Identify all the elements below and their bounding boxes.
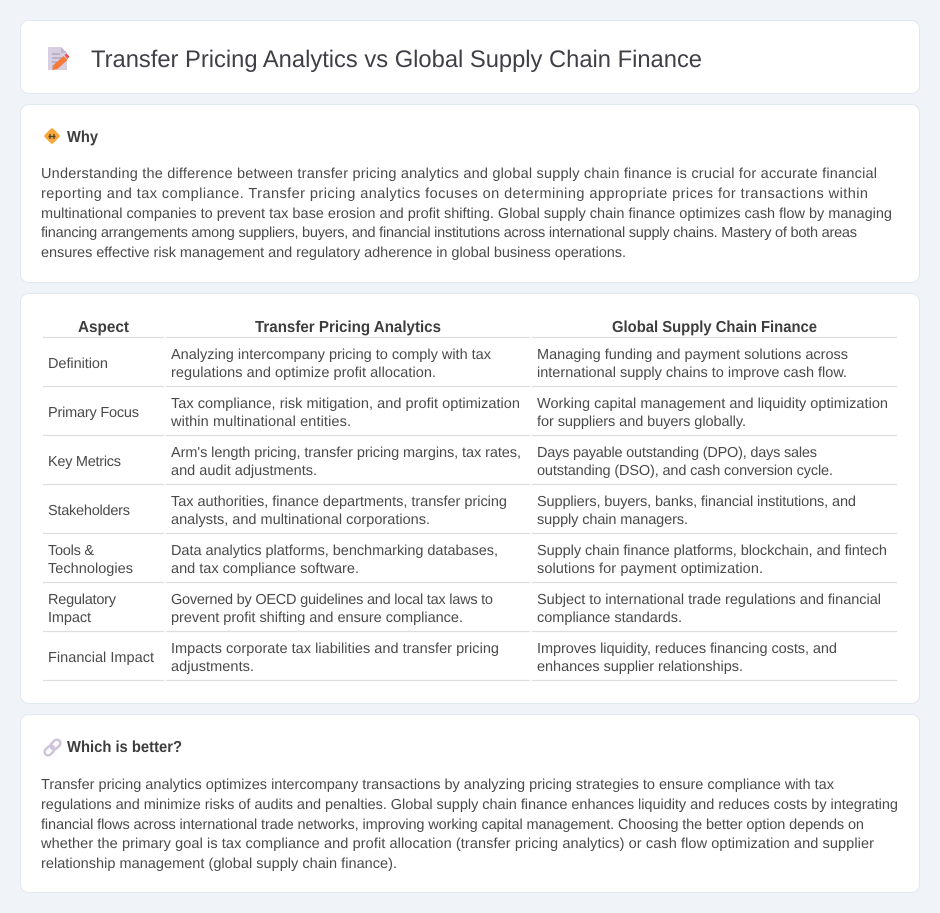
row: financial impact: Financial Impact xyxy=(48,650,154,666)
row: stakeholders: Tax authorities, finance departments, transfer pricing xyxy=(171,494,507,510)
row: primary focus: Tax compliance, risk mitigation, and profit optimization xyxy=(171,396,520,412)
row: key metrics: Days payable outstanding (DPO), days sales xyxy=(537,445,817,461)
row: stakeholders: analysts, and multinational corporations. xyxy=(171,512,430,528)
text block: which is better: regulations and minimize risks of audits and penalties. Global supply chain finance enhances liquidity and reduces costs by integrating xyxy=(41,797,898,813)
row: regulatory impact: Regulatory xyxy=(48,592,117,608)
icon: document with pencil xyxy=(48,47,70,70)
row: regulatory impact: compliance standards. xyxy=(537,610,682,626)
row: definition: Analyzing intercompany pricing to comply with tax xyxy=(171,347,492,363)
panel: title xyxy=(20,20,920,94)
row: financial impact: Impacts corporate tax liabilities and transfer pricing xyxy=(171,641,499,657)
text block: which is better: Transfer pricing analytics optimizes intercompany transactions by analyzing pricing strategies to ensure compliance with tax xyxy=(41,777,835,793)
icon: warning diamond xyxy=(44,128,60,144)
row: regulatory impact: Impact xyxy=(48,610,91,626)
table header: Global Supply Chain Finance xyxy=(612,319,817,336)
table header: Transfer Pricing Analytics xyxy=(255,319,441,336)
text block: why: reporting and tax compliance. Transfer pricing analytics focuses on determining appropriate prices for transactions within xyxy=(41,186,868,202)
table header: Aspect xyxy=(78,319,130,336)
row: definition: international supply chains to improve cash flow. xyxy=(537,365,847,381)
row: tools and technologies: Data analytics platforms, benchmarking databases, xyxy=(171,543,498,559)
icon: chain link xyxy=(43,738,62,757)
panel: why xyxy=(20,104,920,282)
row: primary focus: for suppliers and buyers globally. xyxy=(537,414,746,430)
row: tools and technologies: solutions for payment optimization. xyxy=(537,561,763,577)
row: key metrics xyxy=(48,445,833,479)
row: tools and technologies: Technologies xyxy=(48,561,133,577)
row: financial impact xyxy=(48,641,837,675)
row: regulatory impact: Subject to international trade regulations and financial xyxy=(537,592,881,608)
row: tools and technologies: Supply chain finance platforms, blockchain, and fintech xyxy=(537,543,887,559)
text block: why: Understanding the difference between transfer pricing analytics and global supply chain finance is crucial for accurate financial xyxy=(41,166,877,182)
row: key metrics: outstanding (DSO), and cash conversion cycle. xyxy=(537,463,833,479)
title text: Transfer Pricing Analytics vs Global Supply Chain Finance xyxy=(91,46,702,73)
text block: why xyxy=(41,166,892,261)
row: definition: Definition xyxy=(48,356,108,372)
row: key metrics: Key Metrics xyxy=(48,454,121,470)
heading: which is better: Which is better? xyxy=(67,739,182,756)
text block: which is better: whether the primary goal is tax compliance and profit allocation (transfer pricing analytics) or cash flow optimization and supplier xyxy=(40,836,874,852)
row: financial impact: Improves liquidity, reduces financing costs, and xyxy=(537,641,837,657)
row: definition: regulations and optimize profit allocation. xyxy=(171,365,436,381)
row: key metrics: Arm's length pricing, transfer pricing margins, tax rates, xyxy=(171,445,521,461)
table header xyxy=(78,319,817,336)
row: key metrics: and audit adjustments. xyxy=(171,463,317,479)
row: definition: Managing funding and payment solutions across xyxy=(537,347,848,363)
text block: why: multinational companies to prevent tax base erosion and profit shifting. Global supply chain finance optimizes cash flow by managing xyxy=(41,206,892,222)
row: stakeholders: Stakeholders xyxy=(48,503,130,519)
row: tools and technologies: Tools & xyxy=(48,543,94,559)
row: regulatory impact: Governed by OECD guidelines and local tax laws to xyxy=(171,592,493,608)
row: primary focus xyxy=(48,396,888,430)
row: tools and technologies: and tax compliance software. xyxy=(171,561,359,577)
text block: which is better: relationship management (global supply chain finance). xyxy=(41,856,397,872)
row: primary focus: within multinational entities. xyxy=(170,414,351,430)
heading: why: Why xyxy=(67,129,98,146)
row: regulatory impact xyxy=(48,592,881,626)
row: stakeholders xyxy=(48,494,856,528)
text block: which is better xyxy=(40,777,898,872)
panel: comparison table xyxy=(20,294,920,704)
row: stakeholders: Suppliers, buyers, banks, financial institutions, and xyxy=(537,494,856,510)
text block: why: ensures effective risk management and regulatory adherence in global business operations. xyxy=(41,245,626,261)
text block: why: financing arrangements among suppliers, buyers, and financial institutions across international supply chains. Mastery of both areas xyxy=(41,225,857,241)
row: stakeholders: supply chain managers. xyxy=(537,512,688,528)
row: financial impact: adjustments. xyxy=(171,659,254,675)
row: regulatory impact: prevent profit shifting and ensure compliance. xyxy=(171,610,463,626)
row: primary focus: Working capital management and liquidity optimization xyxy=(537,396,888,412)
row: primary focus: Primary Focus xyxy=(48,405,139,421)
row: financial impact: enhances supplier relationships. xyxy=(537,659,743,675)
row: tools and technologies xyxy=(48,543,887,577)
panel: which is better xyxy=(20,714,920,892)
row: definition xyxy=(48,347,848,381)
text block: which is better: financial flows across international trade networks, improving working capital management. Choosing the better option depends on xyxy=(41,817,864,833)
